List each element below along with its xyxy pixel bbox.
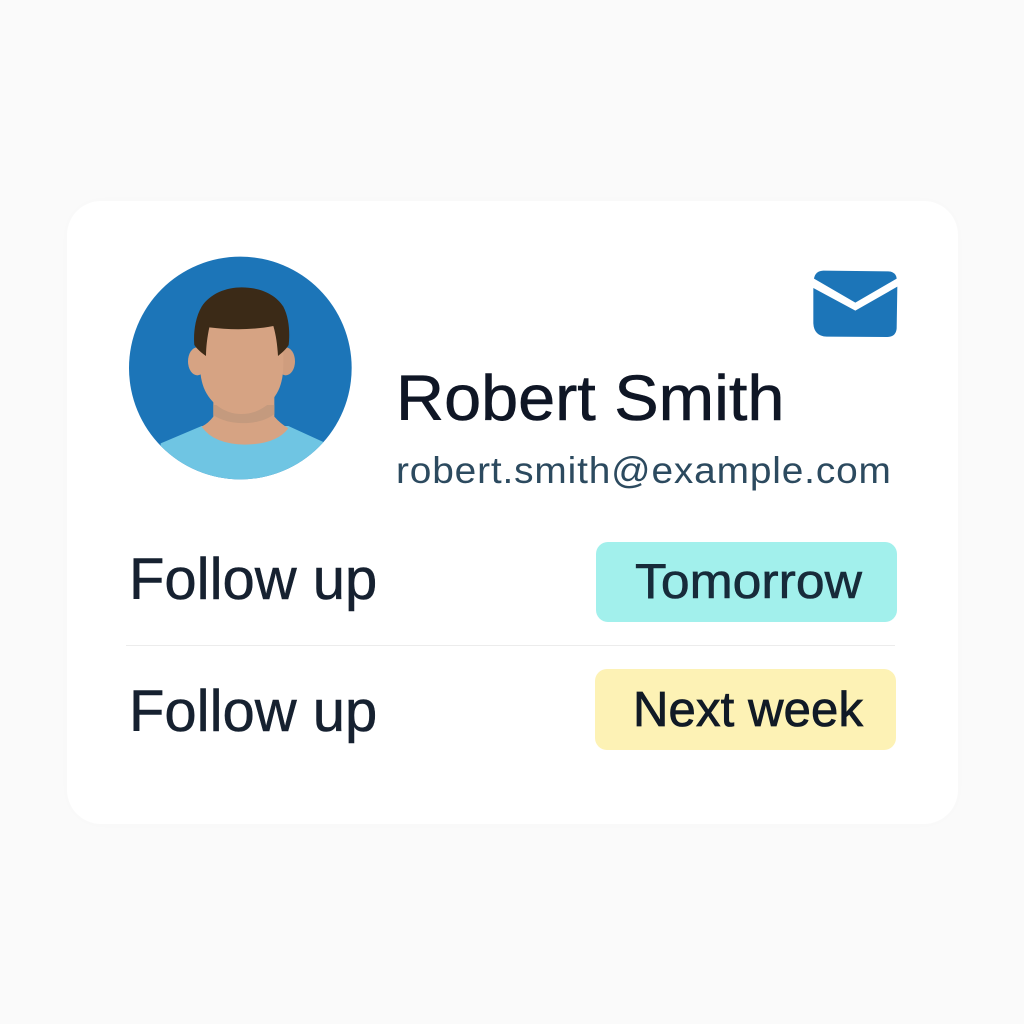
status pill: tomorrow: [596, 542, 897, 622]
panel: contact card: [67, 201, 958, 824]
pill text: next week: Next week: [633, 683, 863, 737]
status pill: next week: [595, 669, 896, 750]
email address: robert.smith@example.com: [396, 450, 892, 491]
row label: follow up 1: Follow up: [129, 547, 377, 612]
divider: [126, 645, 895, 646]
name heading: Robert Smith: [396, 362, 784, 434]
pill text: tomorrow: Tomorrow: [635, 555, 862, 609]
icon: envelope: [813, 270, 898, 337]
row label: follow up 2: Follow up: [129, 679, 377, 744]
avatar: man portrait in blue circle: [129, 256, 352, 480]
